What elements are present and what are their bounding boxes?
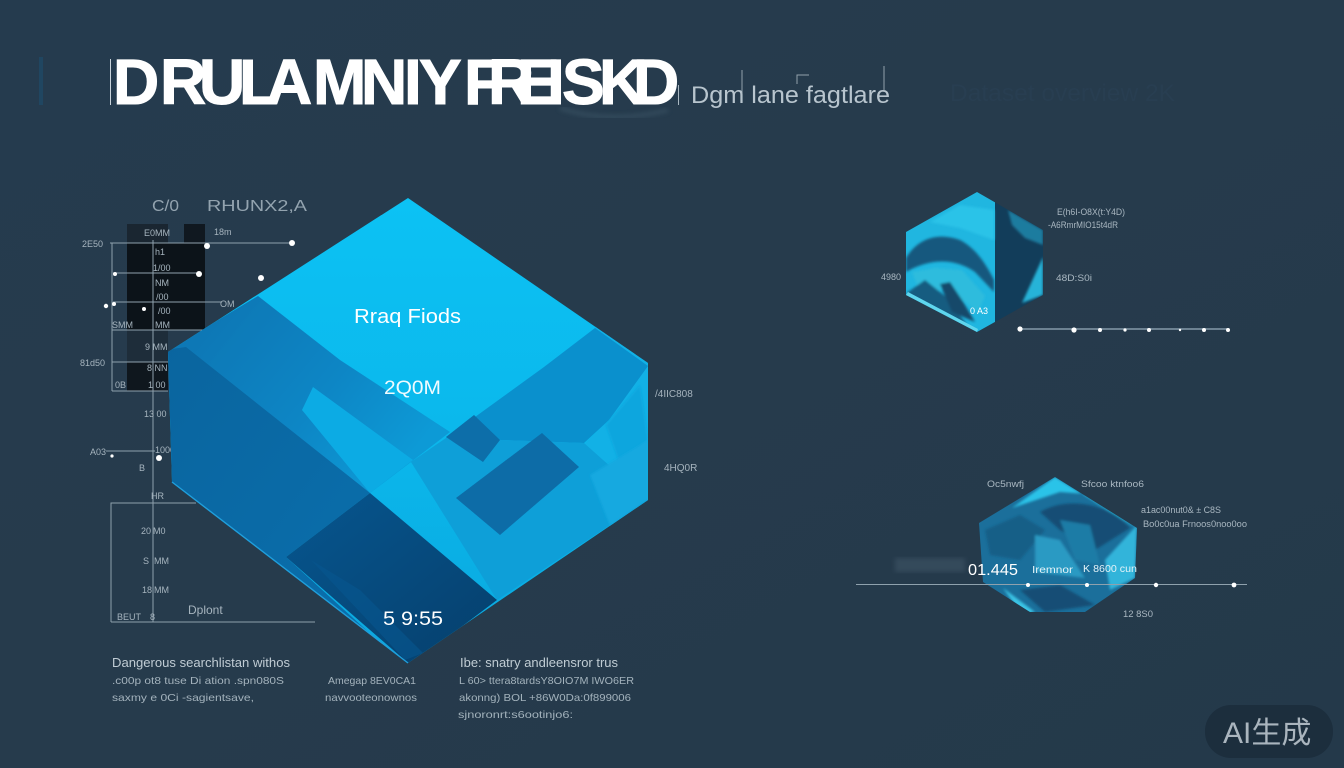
chart labels: 8 NN [147,363,168,373]
chart labels: /00 [158,306,171,316]
facet: left band [165,296,450,493]
hexagon labels: K 8600 cun [1083,564,1137,575]
chart labels: HR [151,491,164,501]
chart labels: Dplont [188,603,223,617]
bottom text: column 1 [112,656,290,704]
facet: dark bottom [286,493,497,663]
label: bottom value: 5 9:55 [383,609,443,630]
chart labels: BEUT [117,612,142,622]
chart labels: 8 [150,612,155,622]
lower right timeline [856,583,1247,587]
right side labels of main hexagon: /4IIC808 [655,389,693,400]
chart labels: OM [220,299,234,309]
facet: dark squares [446,415,500,462]
bottom text: column 3: akonng) BOL +86W0Da:0f899006 [459,692,631,704]
chart labels: MM [155,320,170,330]
chart labels: E0MM [144,228,170,238]
chart labels: M0 [153,526,166,536]
label: center heading: Rraq Fiods [354,306,461,328]
bottom text: column 1: saxmy e 0Ci -sagientsave, [112,692,254,704]
bottom text: column 2: Amegap 8EV0CA1 [328,675,416,687]
hexagon labels: -A6RmrMIO15t4dR [1048,220,1118,230]
hexagon labels: 0 A3 [970,306,988,316]
chart labels: NM [155,278,169,288]
right side labels of main hexagon: 4HQ0R [664,463,697,474]
chart labels: A03 [90,447,106,457]
chart labels: 18m [214,227,232,237]
chart labels: h1 [155,247,165,257]
top right timeline [1017,326,1230,333]
chart labels: 1000 [155,445,175,455]
main hexagon [164,198,652,668]
chart heading: C/0 [152,198,179,215]
chart heading [152,198,307,215]
right side labels of main hexagon [655,389,697,474]
chart labels: MM [154,585,169,595]
hexagon labels: a1ac00nut0& ± C8S [1141,505,1221,515]
chart labels: 20 [141,526,151,536]
lower right hexagon [895,472,1247,619]
facet: lower left [168,347,370,630]
AI watermark: AI生成 [1223,717,1311,750]
chart labels: B [139,463,145,473]
AI watermark [1205,705,1333,758]
chart labels: SMM [112,320,133,330]
bottom text: column 2 [325,675,417,704]
bottom text: column 1: Dangerous searchlistan withos [112,656,290,670]
chart labels: 0B [115,380,126,390]
chart labels [80,227,234,622]
chart labels: 1/00 [153,263,171,273]
hexagon labels: Iremnor [1032,565,1074,576]
subtitle: Dgm lane fagtlare [691,82,890,109]
title: DRULAMNIYFREISKD [113,46,679,118]
chart labels: 9 MM [145,342,168,352]
chart labels: 2E50 [82,239,103,249]
bottom text: column 3: L 60> ttera8tardsY8OIO7M IWO6ER [459,675,634,687]
faint ghost label [895,558,965,572]
chart labels: /00 [156,292,169,302]
hexagon labels: 12 8S0 [1123,609,1153,619]
chart labels: 81d50 [80,358,105,368]
bottom text: column 2: navvooteonownos [325,692,417,704]
facet: right side [595,326,648,526]
label: center value: 2Q0M [384,378,441,399]
chart labels: MM [154,556,169,566]
chart labels: 18 [142,585,152,595]
hexagon labels: Oc5nwfj [987,479,1024,489]
bottom text: column 3 [458,656,634,721]
hexagon labels: E(h6I-O8X(t:Y4D) [1057,207,1125,217]
chart labels: 13 00 [144,409,167,419]
hexagon labels: 48D:S0i [1056,273,1092,283]
left chart [80,198,315,622]
hexagon labels: 01.445 [968,562,1018,579]
chart labels: 1 00 [148,380,166,390]
hexagon labels: Bo0c0ua Frnoos0noo0oo [1143,519,1247,529]
top right hexagon [881,188,1125,338]
header [39,46,1175,118]
hexagon labels [881,207,1125,316]
hexagon labels: Sfcoo ktnfoo6 [1081,479,1144,489]
bottom text: column 1: .c00p ot8 tuse Di ation .spn080S [112,675,284,687]
faint background text: Dataset overview 2K [950,80,1175,107]
chart labels: S [143,556,149,566]
chart heading: RHUNX2,A [207,198,307,215]
hexagon labels [968,479,1247,619]
hexagon labels: 4980 [881,272,901,282]
bottom text: column 3: Ibe: snatry andleensror trus [460,656,618,670]
bottom text: column 3: sjnoronrt:s6ootinjo6: [458,709,573,721]
